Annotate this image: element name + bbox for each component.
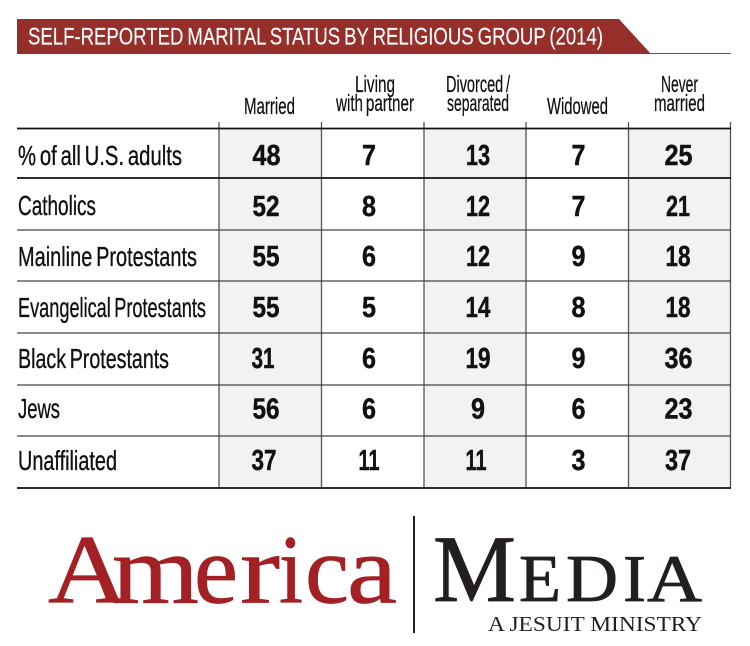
table values: 13 (466, 140, 490, 172)
table values: 5 (362, 292, 376, 324)
table values: 19 (466, 343, 490, 375)
America wordmark: i (279, 516, 303, 624)
row labels: Mainline Protestants (18, 241, 197, 272)
column headers: married (654, 90, 705, 116)
table values: 14 (466, 292, 490, 324)
table values: 6 (572, 394, 586, 426)
Media wordmark: A (647, 542, 702, 616)
column headers: Widowed (547, 93, 608, 119)
Media wordmark: I (623, 542, 646, 616)
table values: 9 (572, 241, 586, 273)
table values (252, 140, 692, 477)
table values: 31 (252, 343, 274, 375)
row labels: Black Protestants (18, 343, 169, 374)
column headers: separated (447, 90, 509, 116)
table values: 9 (471, 394, 485, 426)
table values: 7 (572, 191, 586, 223)
table values: 37 (252, 445, 276, 477)
table values: 7 (362, 140, 376, 172)
Media wordmark: D (566, 542, 618, 616)
table values: 55 (252, 292, 280, 324)
table values: 6 (362, 343, 376, 375)
table values: 18 (666, 292, 690, 324)
row labels: Jews (18, 393, 60, 424)
table values: 25 (664, 140, 692, 172)
table values: 21 (666, 191, 690, 223)
table values: 18 (666, 241, 690, 273)
table values: 11 (466, 445, 486, 477)
shaded columns (219, 128, 730, 488)
logo: America Media (48, 516, 702, 636)
America wordmark: c (305, 516, 349, 624)
America wordmark: r (240, 516, 280, 624)
table values: 8 (572, 292, 586, 324)
table values: 23 (664, 394, 692, 426)
table values: 12 (466, 191, 490, 223)
column headers (244, 71, 705, 119)
table values: 37 (665, 445, 691, 477)
row labels: Catholics (18, 190, 96, 221)
table values: 12 (466, 241, 490, 273)
Media wordmark: M (433, 516, 516, 622)
column headers: with partner (335, 90, 414, 116)
America wordmark: A (48, 516, 128, 624)
table values: 56 (252, 394, 280, 426)
row rules (17, 128, 731, 488)
America wordmark: e (194, 516, 238, 624)
column headers: Never (661, 71, 698, 97)
table values: 48 (252, 140, 280, 172)
table values: 55 (252, 241, 280, 273)
table values: 36 (664, 343, 692, 375)
table values: 3 (572, 445, 586, 477)
column dividers (219, 122, 730, 488)
Media wordmark: E (519, 542, 561, 616)
row labels: Evangelical Protestants (18, 292, 206, 323)
table values: 9 (572, 343, 586, 375)
Media wordmark (433, 516, 702, 622)
table values: 8 (362, 191, 376, 223)
table values: 6 (362, 241, 376, 273)
column headers: Married (244, 93, 295, 119)
America wordmark: m (112, 516, 199, 624)
title banner: SELF-REPORTED MARITAL STATUS BY RELIGIOUS GROUP (2014) (28, 24, 603, 50)
table values: 6 (362, 394, 376, 426)
America wordmark (48, 516, 397, 624)
row labels (18, 140, 206, 476)
column headers: Divorced / (446, 71, 510, 97)
table: marital status by religious group (17, 71, 731, 488)
table values: 11 (358, 445, 380, 477)
logo divider (413, 516, 415, 633)
table values: 52 (252, 191, 280, 223)
row labels: Unaffiliated (18, 445, 117, 476)
row labels: % of all U.S. adults (18, 140, 182, 171)
America wordmark: a (347, 516, 397, 624)
tagline: A JESUIT MINISTRY (488, 612, 702, 636)
column headers: Living (355, 71, 395, 97)
table values: 7 (572, 140, 586, 172)
